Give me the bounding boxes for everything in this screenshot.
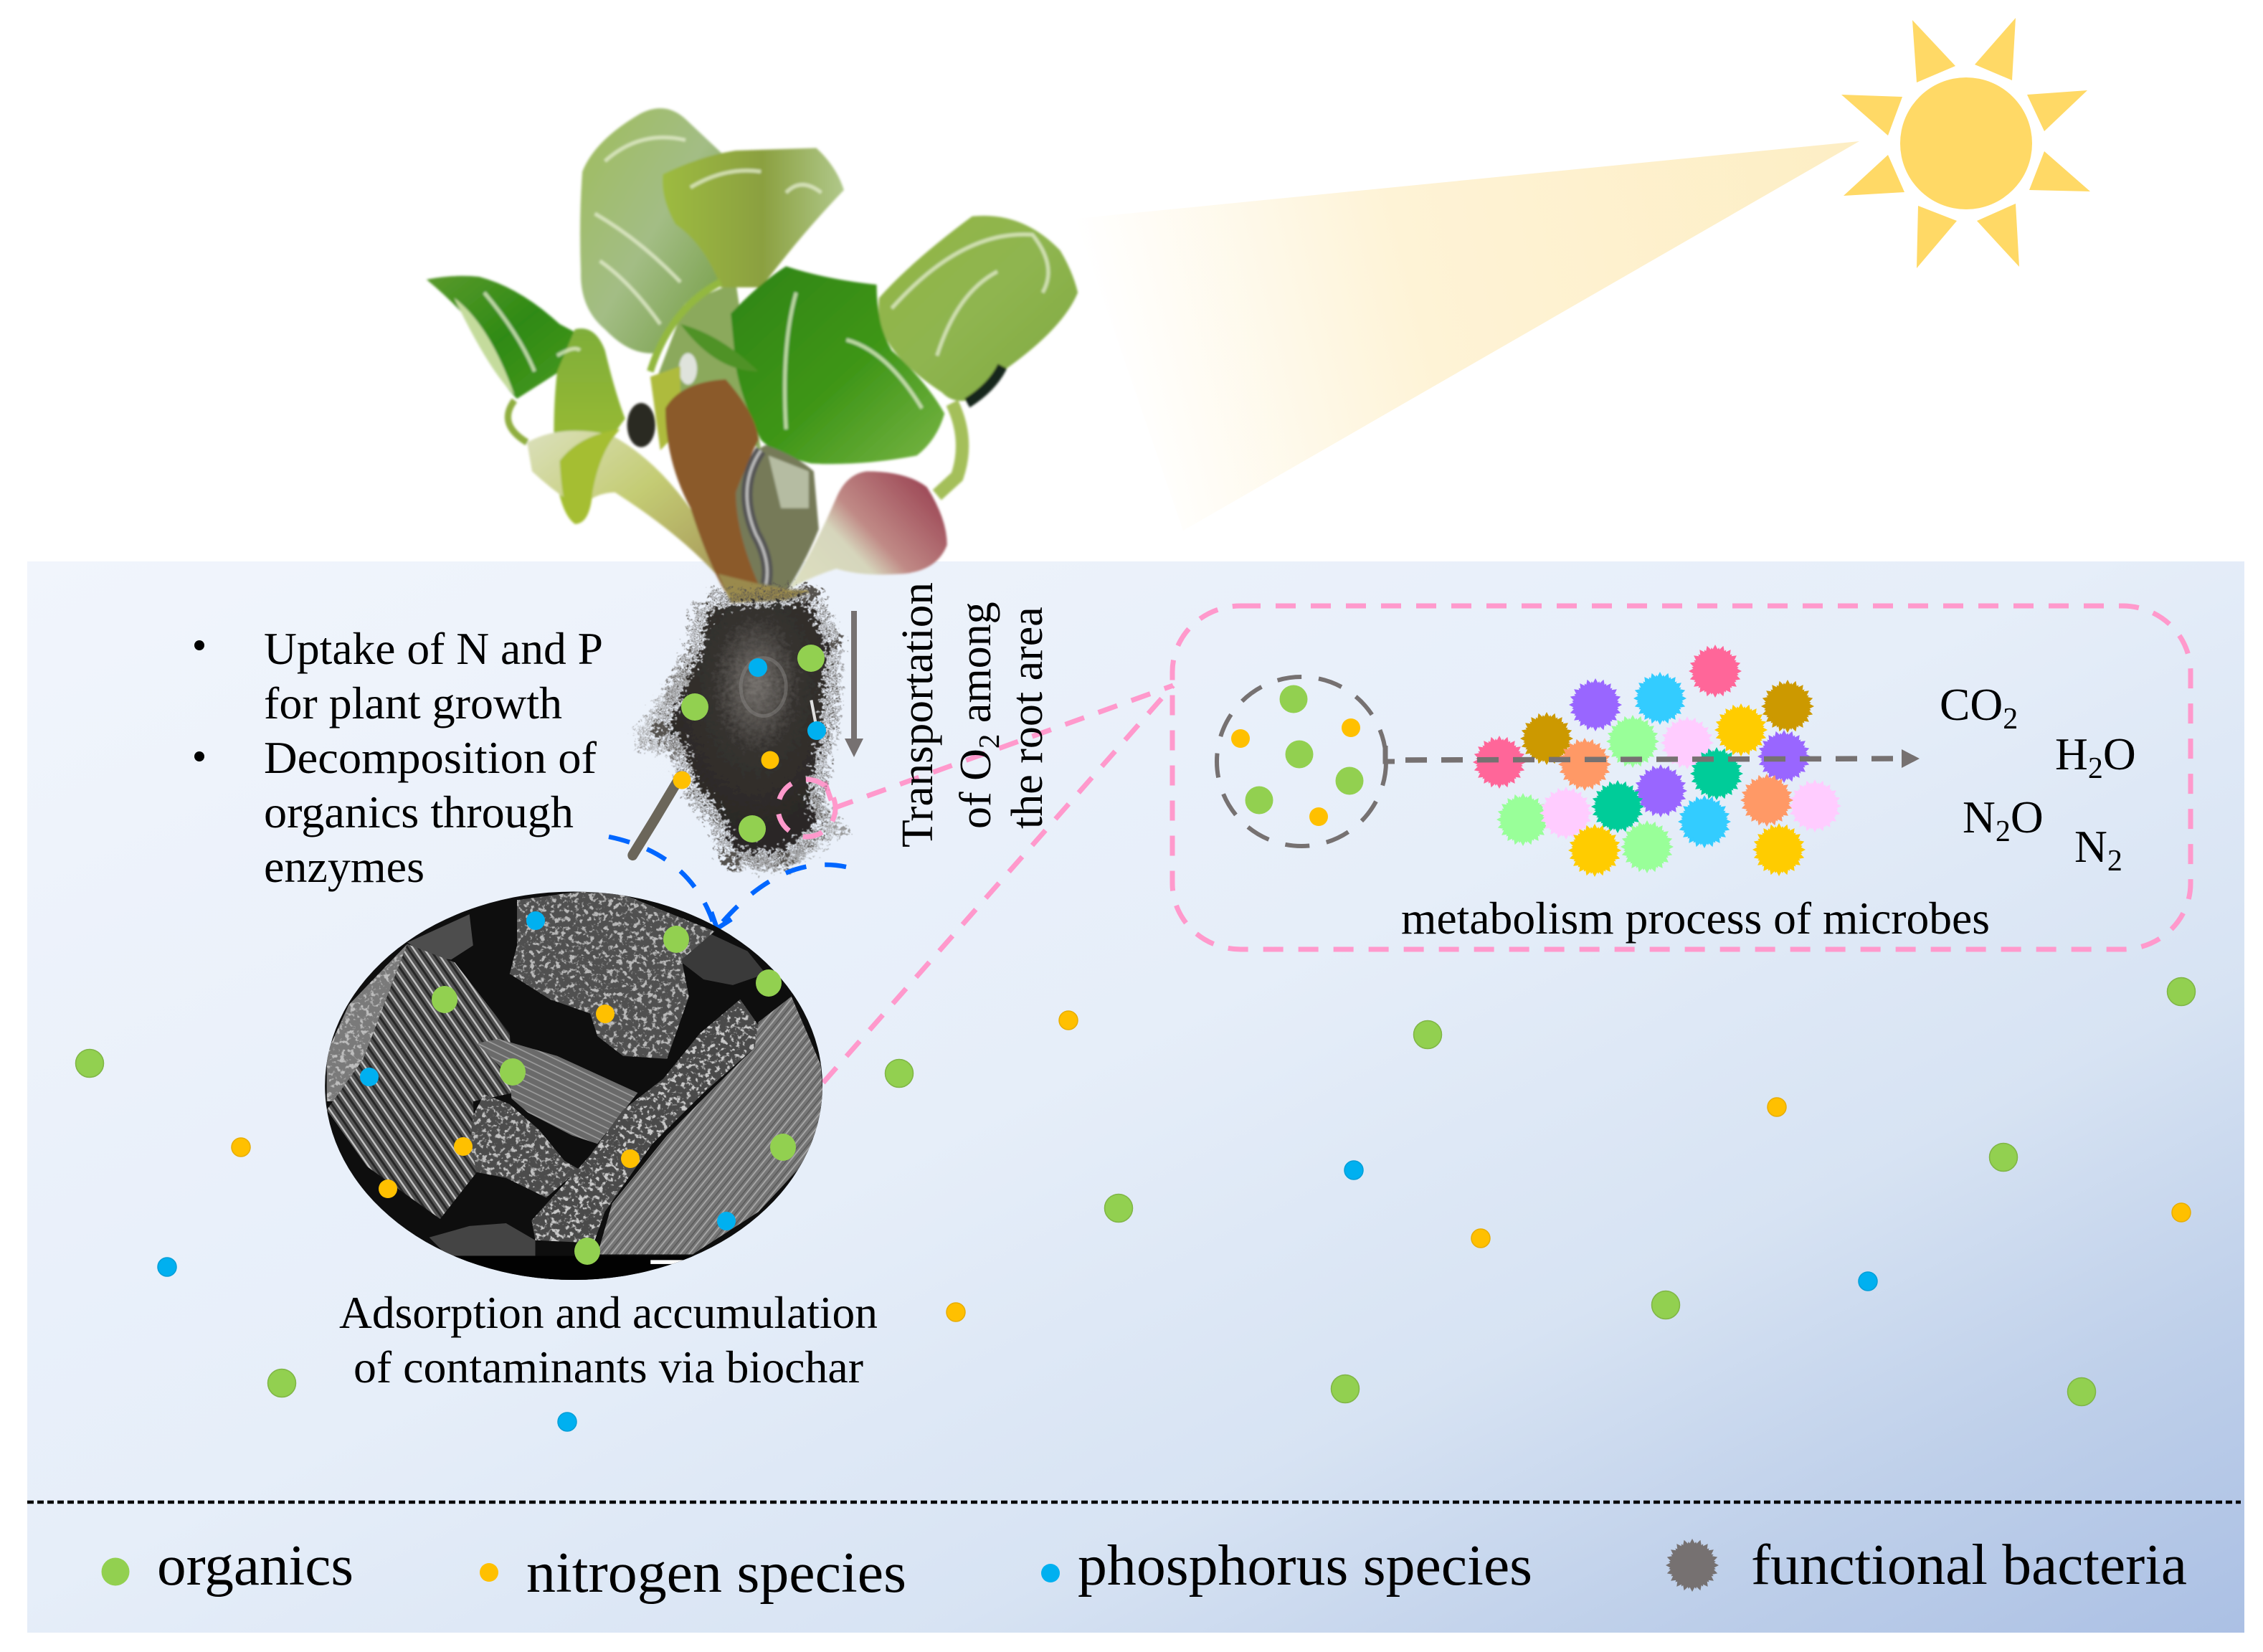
legend: nitrogen marker xyxy=(480,1563,498,1582)
gas products: O xyxy=(2103,728,2136,779)
legend: organics label: organics xyxy=(157,1534,354,1598)
gas products: H xyxy=(2055,728,2088,779)
plant shoot xyxy=(427,108,1078,603)
text: O2 transportation (vertical): of O xyxy=(952,749,1000,829)
pale outer hair wisps xyxy=(637,666,836,863)
lime stem base xyxy=(650,366,680,450)
biochar particles xyxy=(360,911,796,1265)
panel: soil background xyxy=(27,561,2244,1633)
leaf: right xyxy=(878,216,1078,401)
top right dark fragment xyxy=(678,934,766,985)
gas products: 2 xyxy=(2107,845,2122,878)
leaf highlights xyxy=(484,138,1048,429)
plant root xyxy=(632,603,836,863)
bullet 2 xyxy=(194,751,204,761)
lower dark block xyxy=(430,1223,536,1255)
dashed circle of substrates xyxy=(1217,677,1386,846)
small inner leaf xyxy=(680,324,759,371)
substrates inside circle xyxy=(1231,685,1364,826)
black footer strip xyxy=(454,1256,694,1280)
text: plant functions xyxy=(194,623,603,892)
left petiole xyxy=(508,400,527,442)
leaf: upper middle xyxy=(663,148,844,288)
pale spot near centre xyxy=(679,353,697,384)
gas products: 2 xyxy=(2088,752,2103,785)
upper left gray fragment xyxy=(407,914,473,959)
blue arrow head xyxy=(711,912,731,929)
wavy dark stem strand xyxy=(747,450,767,584)
text: plant functions: Uptake of N and P xyxy=(264,623,603,674)
legend: phosphorus marker xyxy=(1041,1564,1060,1582)
dark ground xyxy=(316,886,835,1283)
legend: organics marker xyxy=(102,1557,129,1586)
legend: nitrogen label: nitrogen species xyxy=(526,1542,906,1605)
biochar SEM image xyxy=(316,886,835,1284)
text: plant functions: organics through xyxy=(264,787,574,837)
text: plant functions: enzymes xyxy=(264,841,424,892)
lower stem join xyxy=(718,574,819,603)
legend xyxy=(102,1534,2187,1605)
text: O2 transportation (vertical): 2 xyxy=(972,734,1005,749)
sunlight beam xyxy=(1076,141,1859,531)
bacteria cluster xyxy=(1472,644,1842,878)
lower porous chunk xyxy=(470,1094,579,1197)
gas products: 2 xyxy=(2003,703,2018,736)
dotted left edge xyxy=(327,944,407,1101)
stem: brown xyxy=(665,379,761,600)
scattered contaminant particles xyxy=(76,978,2196,1431)
pink dashed box xyxy=(1172,606,2191,949)
yellow green leaf overlap xyxy=(560,429,620,524)
leaf: center dark green xyxy=(731,266,944,464)
text: O2 transportation (vertical): among xyxy=(952,602,1000,734)
gas products xyxy=(1940,679,2136,878)
root tail xyxy=(632,777,680,855)
petiole: right xyxy=(937,403,962,495)
leaf base: pale lower xyxy=(527,431,718,576)
big right striated fragment xyxy=(597,997,825,1254)
stem: silver xyxy=(736,445,819,592)
panel: microbial metabolism xyxy=(1172,606,2191,949)
plant core behind leaves xyxy=(655,282,761,450)
text: O2 transportation (vertical): Transportation xyxy=(893,582,942,848)
bullet 1 xyxy=(194,640,204,650)
text: biochar caption xyxy=(339,1287,878,1392)
root hair mass xyxy=(670,603,826,850)
blue dashed arcs with arrow xyxy=(609,837,846,925)
silver stem highlight patch xyxy=(769,455,809,508)
text: O2 transportation (vertical) xyxy=(893,582,1052,848)
text: plant functions: for plant growth xyxy=(264,678,562,728)
legend: bacteria label: functional bacteria xyxy=(1751,1534,2187,1597)
gas products: CO xyxy=(1940,679,2003,730)
dark node right xyxy=(967,366,1002,403)
dark node left xyxy=(627,403,655,447)
wavy stem highlight xyxy=(747,450,767,584)
text: biochar caption: of contaminants via biochar xyxy=(354,1342,863,1392)
text: plant functions: Decomposition of xyxy=(264,732,597,783)
gas products: 2 xyxy=(1996,815,2011,848)
curved inner petiole xyxy=(650,282,721,371)
radial root hairs xyxy=(670,603,826,850)
root white filament xyxy=(811,700,816,726)
caption: metabolism process of microbes xyxy=(1401,893,1990,944)
left fibrous block xyxy=(327,944,513,1219)
pink dashed lines linking biochar and root to microbes xyxy=(823,685,1173,1083)
pink dashed zoom circle on root xyxy=(778,779,835,837)
root circle highlight xyxy=(741,658,786,716)
text: biochar caption: Adsorption and accumulation xyxy=(339,1287,878,1338)
icon: sun xyxy=(1841,18,2090,268)
gray arrow: oxygen transport xyxy=(845,611,863,757)
legend: phosphorus label: phosphorus species xyxy=(1078,1534,1532,1598)
left leaf pale underside xyxy=(454,298,514,395)
leaf: left yellow green xyxy=(554,328,625,524)
gas products: N xyxy=(2074,821,2107,872)
legend: bacteria marker xyxy=(1665,1538,1719,1592)
top porous chunk xyxy=(510,891,715,1059)
dashed arrow through bacteria xyxy=(1385,746,1920,768)
leaf: upper left pale xyxy=(580,108,726,353)
scale bar xyxy=(650,1260,687,1264)
gas products: O xyxy=(2011,792,2044,842)
diagonal porous strip xyxy=(531,1000,762,1243)
gas products: N xyxy=(1963,792,1996,842)
root particles xyxy=(673,645,826,842)
text: O2 transportation (vertical): the root area xyxy=(1003,607,1052,829)
middle leaf fragment xyxy=(477,1039,637,1144)
flower bulb xyxy=(789,471,947,589)
leaf: left dark xyxy=(427,276,580,399)
